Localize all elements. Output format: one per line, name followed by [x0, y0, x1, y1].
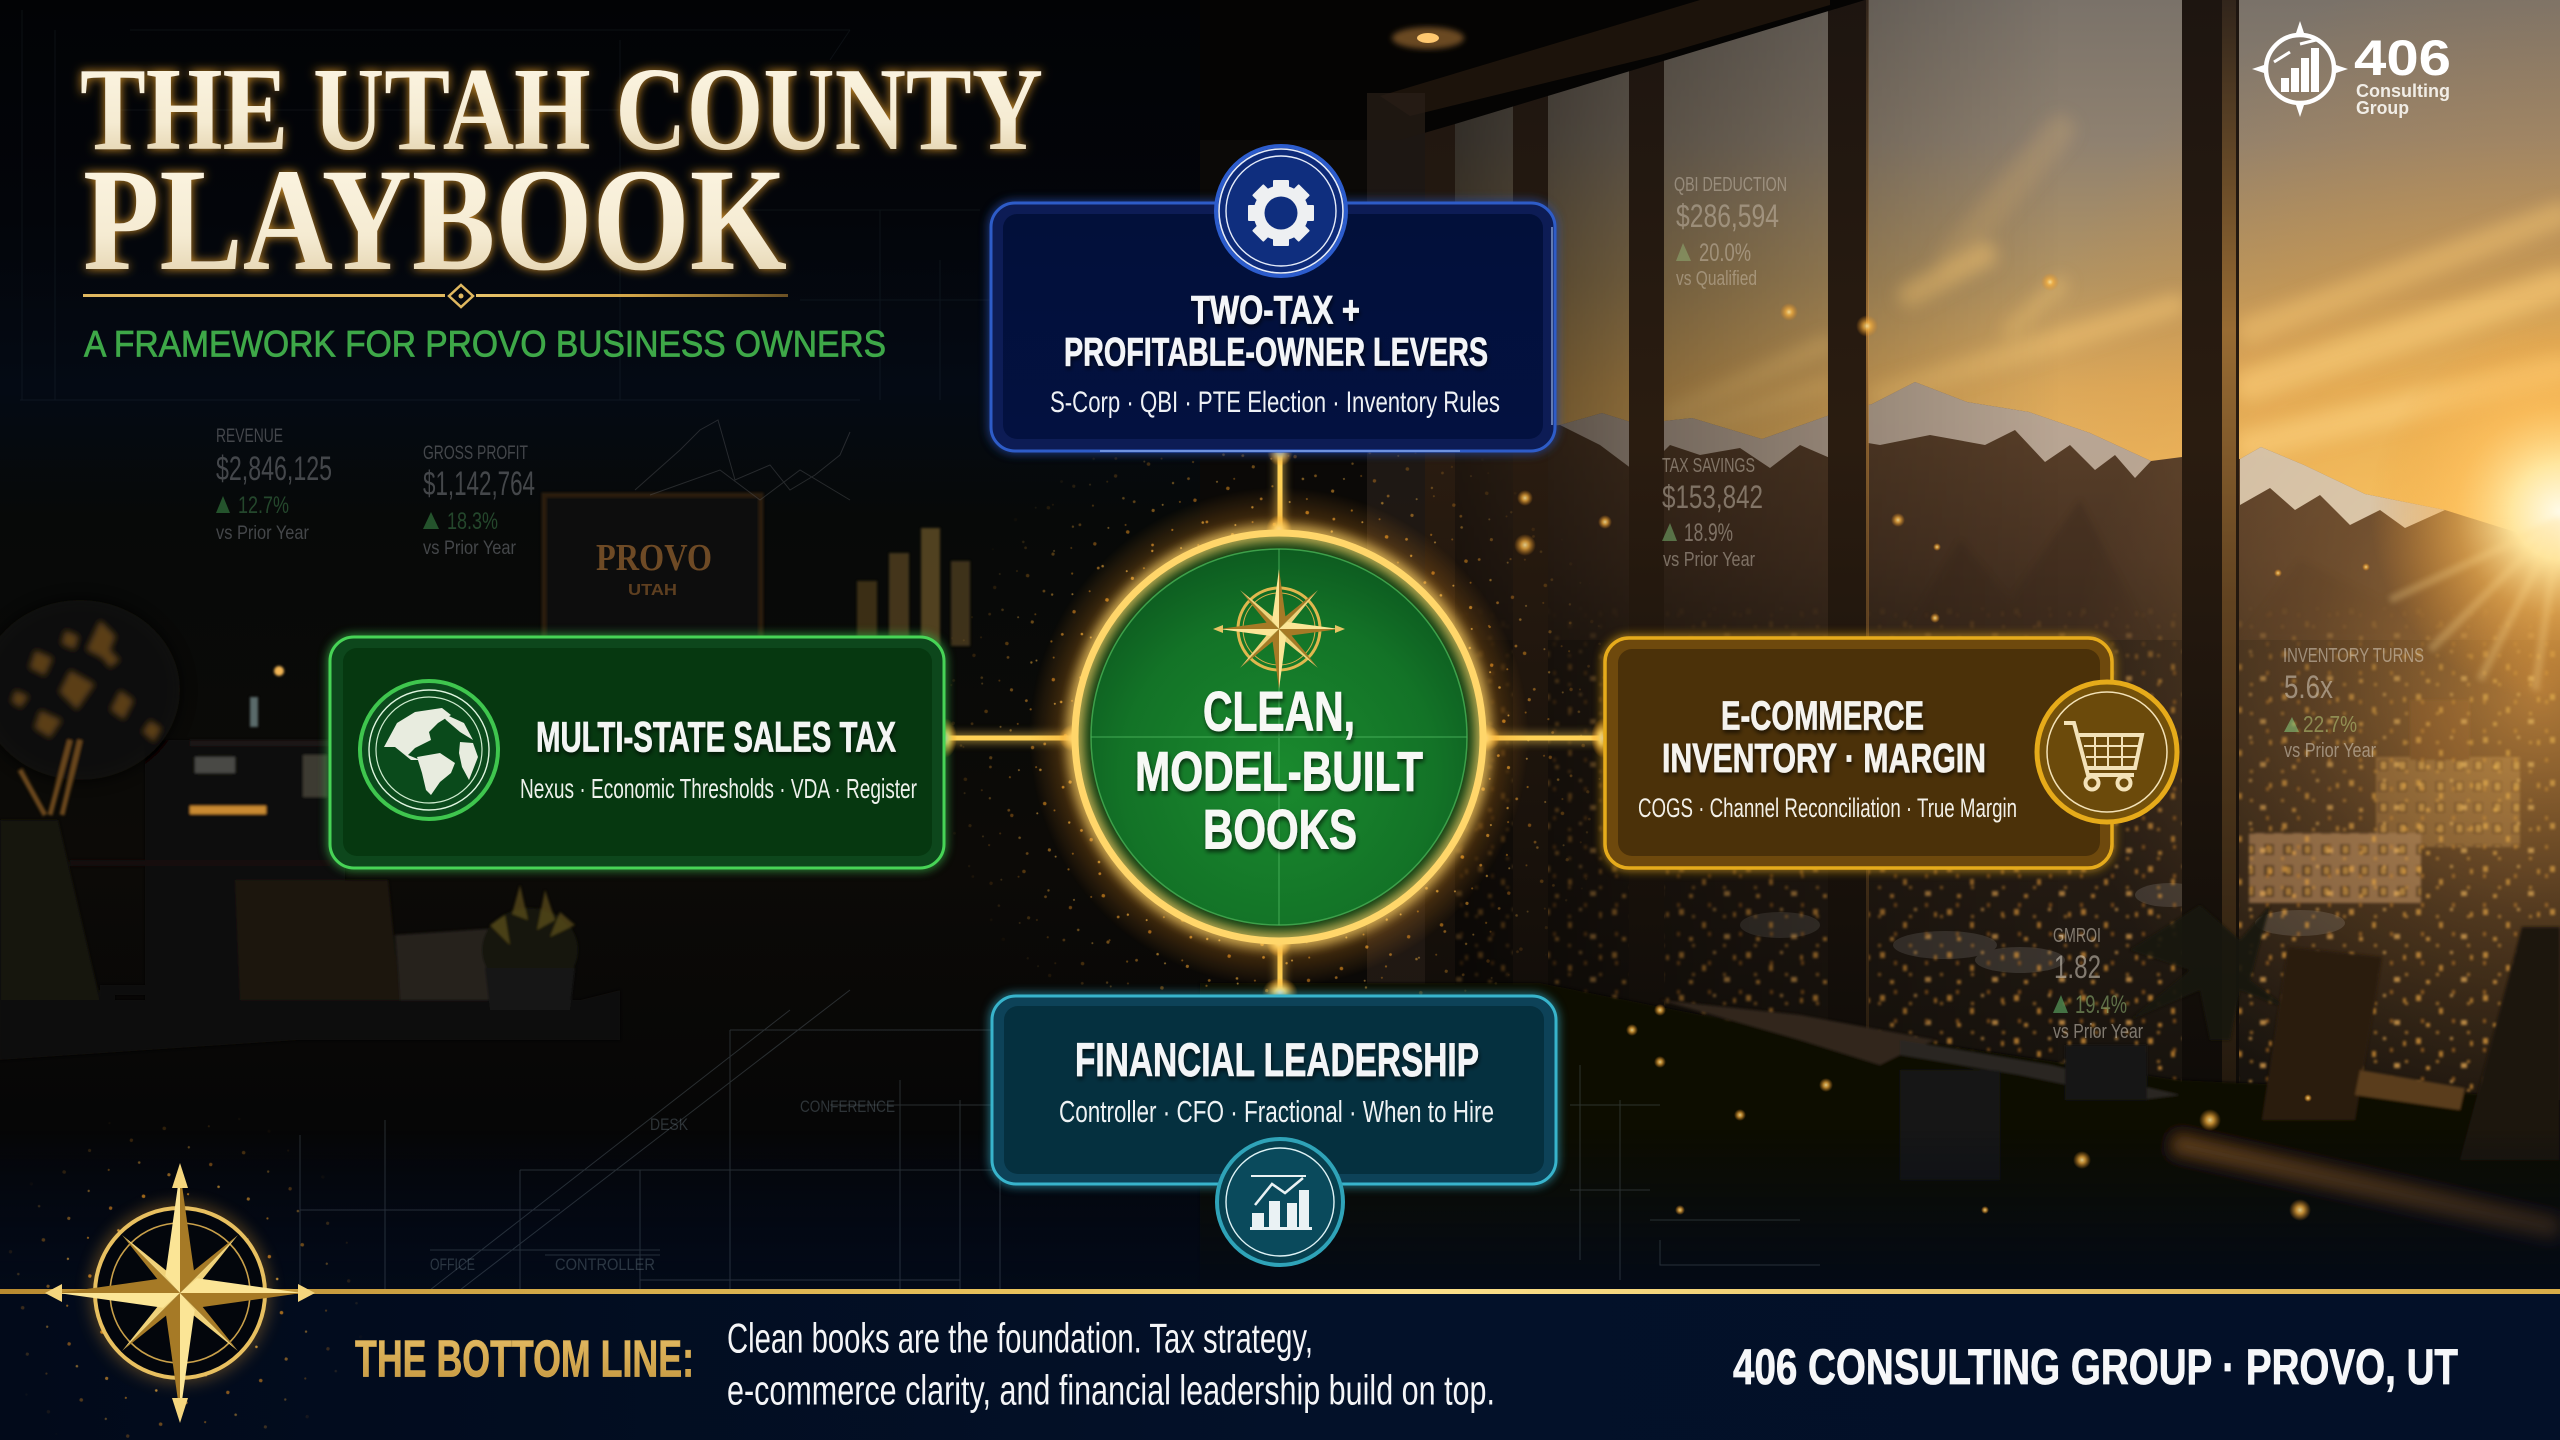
sky through windows [1200, 0, 2560, 1120]
hub gold ring [1075, 533, 1483, 941]
top card title [1064, 288, 1488, 374]
right card body [1605, 638, 2112, 868]
floating light orbs [1514, 273, 2370, 1221]
hub inner field [1074, 532, 1484, 942]
subtitle: A FRAMEWORK FOR PROVO BUSINESS OWNERS [84, 324, 886, 364]
bottom band [0, 1289, 2560, 1440]
faint KPI: inventory turns: 5.6x [2284, 669, 2333, 705]
right card title [1662, 692, 1986, 781]
window mullions [1425, 0, 2239, 1100]
provo sign text: UTAH [628, 582, 677, 599]
faint KPI: GMROI: vs Prior Year [2053, 1021, 2143, 1043]
panel: two-tax levers [991, 146, 1555, 451]
faint sparkline [635, 420, 850, 500]
logo: 406 consulting group: Consulting [2356, 81, 2450, 101]
gold particles around hub [950, 452, 1603, 994]
bottom card body [992, 996, 1556, 1184]
faint KPI: gross profit: $1,142,764 [423, 465, 535, 503]
left card inner [343, 648, 932, 856]
icon: gear [1216, 146, 1346, 276]
blueprint lines lower [300, 990, 1820, 1290]
bottom line label: THE BOTTOM LINE: [355, 1330, 694, 1388]
bottom card title: FINANCIAL LEADERSHIP [1075, 1033, 1479, 1086]
right card title: INVENTORY · MARGIN [1662, 735, 1986, 781]
icon: hub compass [1213, 569, 1345, 689]
faint KPI: tax savings [1662, 455, 1763, 571]
buildings [2249, 700, 2520, 903]
faint KPI: inventory turns: vs Prior Year [2284, 740, 2376, 762]
hub: clean model-built books [1029, 487, 1529, 987]
faint KPI: inventory turns [2283, 645, 2424, 762]
faint KPI: revenue: vs Prior Year [216, 523, 310, 544]
faint KPI: QBI deduction: QBI DEDUCTION [1674, 174, 1787, 196]
bottom fade [0, 1130, 2560, 1295]
top card title: PROFITABLE-OWNER LEVERS [1064, 330, 1488, 374]
faint KPI: GMROI: 19.4% [2075, 991, 2127, 1019]
title [80, 43, 1043, 301]
ceiling [1200, 0, 1865, 140]
top card body [991, 203, 1555, 451]
logo: 406 consulting group: Group [2356, 98, 2409, 118]
faint KPI: QBI deduction: $286,594 [1676, 198, 1779, 234]
right card inner [1618, 649, 2100, 856]
faint KPI: inventory turns: 22.7% [2303, 711, 2357, 737]
top card highlight [1100, 227, 1552, 451]
faint KPI: GMROI [2053, 925, 2143, 1043]
hub green disc [1091, 549, 1467, 925]
hub title: BOOKS [1203, 798, 1357, 860]
logo: 406 consulting group [2252, 21, 2451, 118]
hub title [1135, 680, 1423, 860]
bottom line message: e-commerce clarity, and financial leadership build on top. [727, 1366, 1495, 1414]
city [1440, 640, 2560, 1100]
room left: shelves, tree, chair, laptop, desk [0, 495, 970, 1060]
left card items: Nexus · Economic Thresholds · VDA · Register [520, 773, 917, 804]
wall panel [1367, 93, 1425, 1093]
faint KPI: gross profit: 18.3% [447, 508, 498, 535]
blueprint labels [430, 1097, 895, 1274]
bottom line message: Clean books are the foundation. Tax strategy, [727, 1314, 1313, 1362]
left card body [330, 637, 944, 868]
icon: globe [360, 681, 498, 819]
faint KPI: tax savings: vs Prior Year [1663, 549, 1755, 571]
panel: e-commerce inventory margin [1605, 638, 2177, 868]
panel: financial leadership [992, 996, 1556, 1265]
blueprint labels: DESK [650, 1115, 689, 1134]
icon: growth chart [1217, 1139, 1343, 1265]
faint KPI: inventory turns: INVENTORY TURNS [2283, 645, 2424, 667]
faint KPI: revenue [216, 426, 332, 544]
title: PLAYBOOK [83, 138, 787, 301]
icon: cart [2037, 682, 2177, 822]
bottom line message [727, 1314, 1495, 1414]
hub title: CLEAN, [1203, 680, 1355, 742]
faint KPI: tax savings: TAX SAVINGS [1662, 455, 1755, 477]
bottom card inner [1004, 1006, 1544, 1174]
faint KPI: gross profit: vs Prior Year [423, 538, 517, 559]
mountains [1440, 382, 2560, 700]
faint KPI: QBI deduction: vs Qualified [1676, 268, 1757, 290]
left card title: MULTI-STATE SALES TAX [536, 714, 896, 762]
blueprint lines top left [20, 10, 1000, 400]
panel: multi-state sales tax [330, 637, 944, 868]
provo sign text [596, 537, 712, 599]
faint KPI: revenue: $2,846,125 [216, 450, 332, 488]
blueprint labels: CONFERENCE [800, 1097, 895, 1116]
title: THE UTAH COUNTY [80, 43, 1043, 175]
faint KPI: QBI deduction: 20.0% [1699, 239, 1751, 267]
faint KPI: revenue: REVENUE [216, 426, 283, 447]
connectors [933, 436, 1615, 1008]
hub crosshair [1091, 549, 1467, 925]
faint KPI: revenue: 12.7% [238, 492, 289, 519]
faint KPI: GMROI: GMROI [2053, 925, 2101, 947]
title divider [83, 285, 788, 307]
faint KPI: gross profit: GROSS PROFIT [423, 443, 528, 464]
top card title: TWO-TAX + [1191, 288, 1360, 332]
faint KPI: tax savings: 18.9% [1684, 519, 1733, 547]
faint KPI: GMROI: 1.82 [2054, 949, 2101, 985]
bottom card items: Controller · CFO · Fractional · When to Hire [1059, 1094, 1494, 1129]
provo sign text: PROVO [596, 537, 712, 579]
right card items: COGS · Channel Reconciliation · True Margin [1638, 793, 2017, 823]
top card inner [1003, 214, 1543, 439]
logo wordmark: 406 [2354, 30, 2451, 86]
faint KPI: gross profit [423, 443, 535, 559]
logo emblem [2252, 21, 2348, 117]
blueprint labels: CONTROLLER [555, 1255, 655, 1274]
hub title: MODEL-BUILT [1135, 740, 1423, 802]
right card title: E-COMMERCE [1721, 692, 1924, 738]
faint KPI: QBI deduction [1674, 174, 1787, 290]
room right: plant, chairs, table [1200, 905, 2560, 1300]
blueprint labels: OFFICE [430, 1255, 475, 1274]
faint KPI: tax savings: $153,842 [1662, 479, 1763, 515]
icon: large gold compass [0, 1110, 370, 1440]
sun and glow [1800, 300, 2560, 1100]
gold rule [0, 1289, 2560, 1294]
top card items: S-Corp · QBI · PTE Election · Inventory Rules [1050, 386, 1500, 419]
